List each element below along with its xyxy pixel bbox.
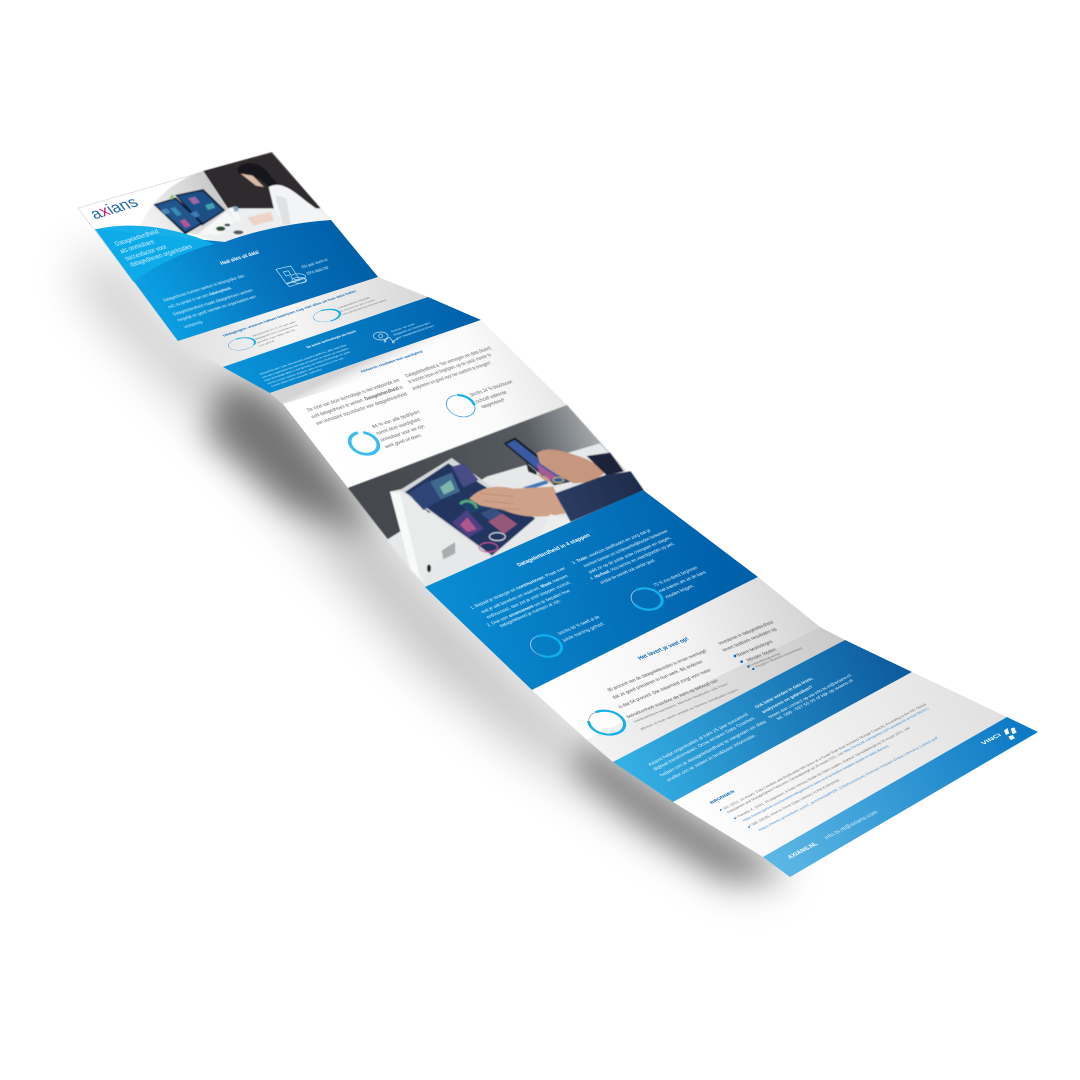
list: steps 1 and 2: datagelettered je mensen al zijn. [498,599,563,629]
icon: analytics network [373,332,398,343]
list: steps 3 and 4: pakt ze op de juiste actie overgaan en slagen. [587,535,673,575]
panel: footer [763,717,1038,877]
text: investing in literacy: Minder fouten [745,647,778,663]
text: right column: te kunnen lezen en begrijpen, op de juiste manier te [407,353,493,385]
list: sources: DataSphere and StorageSphere Forecasts. Geraadpleegd op 26 maart 2021, van https://www.idc.com/getdoc.jsp?containerId=prUS47560321 [726,707,930,814]
text: investing in literacy: levert tastbare resultaten op [721,627,779,653]
donut: 94% [337,424,391,463]
text: investing in literacy: Betere beslissingen [735,640,775,658]
text: right column: analyseren en goed voor het voetlicht te brengen”. [411,360,494,392]
donut: challenge two [309,307,344,325]
intro paragraphs [162,273,258,329]
list: sources: ¹ IDC (2021, 24 maart). Data Creation and Replication Will Grow at a Faster Rate than Installed Storage Capacity, According to the IDC Global [720,703,928,811]
heading: technology: De juiste technologie als basis [305,329,358,349]
text: benefits paragraph: dat ze goed presteren in hun werk. Bij anderen [611,660,705,700]
text: 66% [556,615,606,643]
text: investing in literacy [717,620,779,663]
heading: haal alles uit data: Haal alles uit data! [219,250,261,267]
title: datageletterdheid: datagedreven organisaties [129,244,194,268]
text: 94%: 94 % van alle bedrijven [371,409,421,430]
text: technology stat: Gartner: tot meer [390,322,416,333]
title: datageletterdheid [114,229,194,268]
text: contact: Ook beter worden in data lezen, [754,676,814,709]
bullets: benefits [734,655,754,670]
stat: 25% data: Elk jaar komt er [300,257,330,269]
panel: four steps [425,490,758,690]
text: technology paragraph: Datawarehouses, tools, best-practice analytics-platforms: alles staat klaar [258,344,347,376]
text: 24% [469,379,514,410]
list: sources: ² Panetta, K. (2021, 10 augustus). A Data Literacy Guide for D&A Leaders. Gartner. Geraadpleegd op 26 maart 2021, van [735,726,911,819]
logo: vinci: VINCI [980,733,1004,746]
donut: 24% [435,388,486,424]
icon: data stack [276,266,307,287]
panel: white literacy section [270,320,567,488]
list: steps 1 and 2 [469,566,573,629]
text: right column [404,346,494,392]
logo: axians: axians [86,194,142,223]
text: challenge one: datagedreven bedrijven is [253,324,299,341]
intro paragraphs: voorsprong. [183,319,204,329]
donut: 66% [524,631,568,661]
text: about axians: helpen om je datageletterdheid te vergroten en data [659,720,768,778]
list: steps 1 and 2: enthousiast, dan zet je snel stappen vooruit. [485,580,573,620]
text: challenge two: Datakwaliteit bepaalt [337,296,371,309]
panel: sources [673,672,1007,857]
list: steps 3 and 4: mensen kennen en schijnwerkelijkheden herkennen [582,529,670,569]
panel: technology band [223,297,481,393]
text: 24%: datagelettered² [480,398,506,410]
donut: 85% [581,706,632,739]
heading: benefits: Het levert je veel op! [636,636,691,661]
heading: sources: BRONNEN [709,789,736,805]
text: 75%: 75 % zou direct beginnen [652,565,700,588]
text: challenge two: de waarde van een analyse [339,298,376,313]
intro paragraphs: mogelijk en geeft mensen en organisaties een [176,294,258,322]
text: technology paragraph: mensen moeten inzichten begrijpen, delen en toepassen in hun werk [266,357,345,385]
text: contact: analyseren en gebruiken? [760,685,814,714]
text: 75%: zouden krijgen. [664,583,696,600]
list: sources: https://www.accenture.com/_acnmedia/PDF-118/Accenture-Human-Impact-Data-Literacy-Latest.pdf [758,736,940,832]
text: technology stat: door datageletterdheid binnen [395,324,435,340]
text: benefits paragraph: 85 procent van de datagelettereden is ervan overtuigd [606,649,708,693]
list: steps 3 and 4: 4. Herhaal. Hou kennis en vaardigheden op peil, [589,541,676,581]
text: left column: echt datagedreven te werken. Datageletterdheid is [310,385,405,420]
title: datageletterdheid: succesfactor voor [124,244,169,262]
text: challenge one [251,320,299,347]
text: contact: tel. 088 - 597 50 00 of kijk op axians.nl [775,678,854,721]
donut: challenge one [224,335,259,353]
text: technology paragraph: maar technologie alleen is niet genoeg voor betere beslissingen en groei [263,350,351,382]
bullets: sources [720,809,750,828]
text: about axians: sneller om te zetten in bruikbare informatie. [665,733,758,783]
text: 94%: werk goed uit doen. [384,433,424,450]
list: steps 3 and 4: omdat de wereld ook verder gaat. [599,558,657,585]
text: 75% [652,565,708,600]
text: 94%: onmisbaar voor we zijn [379,424,426,443]
intro paragraphs: Datageletterdheid maakt datagedreven werken [172,288,254,316]
text: technology paragraph: voor een organisatie die met data wil werken en sturen op resultaten [260,347,350,379]
text: 94% [371,409,426,450]
text: technology paragraph: zodat data echt waarde oplevert [270,368,323,388]
heading: literacy: Adviseren: resultaten heel vaardigheid [359,349,424,373]
panel: challenges strip [178,277,428,367]
text: 75%: met trainen als ze de kans [657,570,708,594]
intro paragraphs: ooit, nu sprake is van een dataexplosie. [167,285,233,309]
text: 66%: juiste training gehad. [560,621,606,643]
title: datageletterdheid: Datageletterdheid [114,229,161,248]
text: investing in literacy: Investeren in datageletterdheid [717,620,775,646]
text: about axians: Axians helpt organisaties al ruim 25 jaar succesvol [647,712,750,767]
list: steps 3 and 4: 3. Train: voorkom deelfouten en zorg dat je [570,528,653,566]
photo: hands on tablet and phone [348,405,644,587]
text: benefits paragraph [606,649,720,720]
logo: vinci [980,727,1017,746]
text: challenge one: voor gebruik [257,339,276,347]
panel: contact band [613,640,912,802]
page shadow [80,245,790,880]
text: benefits paragraph: betrokkenheid waardoor de kans op behoud van [625,679,720,720]
donut: 75% [625,584,669,614]
list: sources: https://www.gartner.com/smarterwithgartner/a-data-and-analytics-leaders-guide-to-data-literacy [742,744,890,822]
intro paragraphs: Datagedreven kunnen werken is belangrijker dan [162,273,246,302]
list: steps 1 and 2: 2. Doe een assessment om te bepalen hoe [485,589,572,628]
wave: light blue title area [95,226,214,282]
list: sources: ³ Qlik (2018). How to Drive Data Literacy in the Enterprise. [748,778,841,827]
heading: four steps: Datageletterdheid in 4 stappen [516,533,592,568]
title: datageletterdheid: als onmisbare [119,239,156,255]
text: contact: Neem dan contact op via info.bi.nl@axians.nl [767,673,852,719]
list: steps 1 and 2: wat je wilt bereiken en waarom. Maak mensen [480,574,570,615]
text: 24%: zichzelf volleerde [474,390,509,405]
panel: benefits [532,577,845,762]
stat: 25% data: 25% data bij¹ [305,265,330,276]
text: email: info.bi.nl@axians.com [824,810,880,841]
text: benefits paragraph: is dat 54 procent. Die zekerheid zorgt voor meer [617,668,713,710]
text: right column: Datageletterdheid is “het vermogen om data (lezen) [404,346,493,379]
photo: woman at desk with monitors [140,152,332,244]
text: challenge one: sprake van data die fit [255,329,296,344]
text: about axians: digitaal transformeren. Onze ervaren Data Coaches [652,716,757,772]
list: steps 3 and 4 [570,528,676,585]
list: steps 1 and 2: 1. Bepaal je strategie en communiceer. Praat over [469,566,568,611]
text: challenge two: maar niet elk team kan hiermee werken [341,298,388,316]
text: 94%: noemt deze vaardigheid [375,417,422,437]
panel: benefits: Kostenbesparing [747,652,781,667]
text: website: AXIANS.NL [786,841,820,860]
text: left column: een onmisbare succesfactor voor datagedrevenheid. [315,391,410,427]
text: 24%: Sechts 24 % beschouwt [469,379,514,398]
text: challenge one: Bij slechts 27,5 % van alle [251,320,297,337]
text: 66%: Sechts 66 % heeft al de [556,615,602,636]
panel: benefits: medewerkers toeneemt. Mensen bedrijven ook meer [632,682,730,723]
heading: challenges: Uitdagingen: waarom lukken bedrijven nog niet alles uit hun data halen [222,289,358,337]
panel: intro [78,152,378,341]
text: left column: De inzet van deze technologie is niet voldoende om [306,378,402,413]
text: technology stat: datagedreven beslissingen [392,321,431,336]
panel: benefits: Hogere klanttevredenheid [754,647,804,668]
panel: benefits: plezier in hun werk omdat ze betere resultaten halen. [639,687,741,731]
stat: 25% data [300,257,330,276]
